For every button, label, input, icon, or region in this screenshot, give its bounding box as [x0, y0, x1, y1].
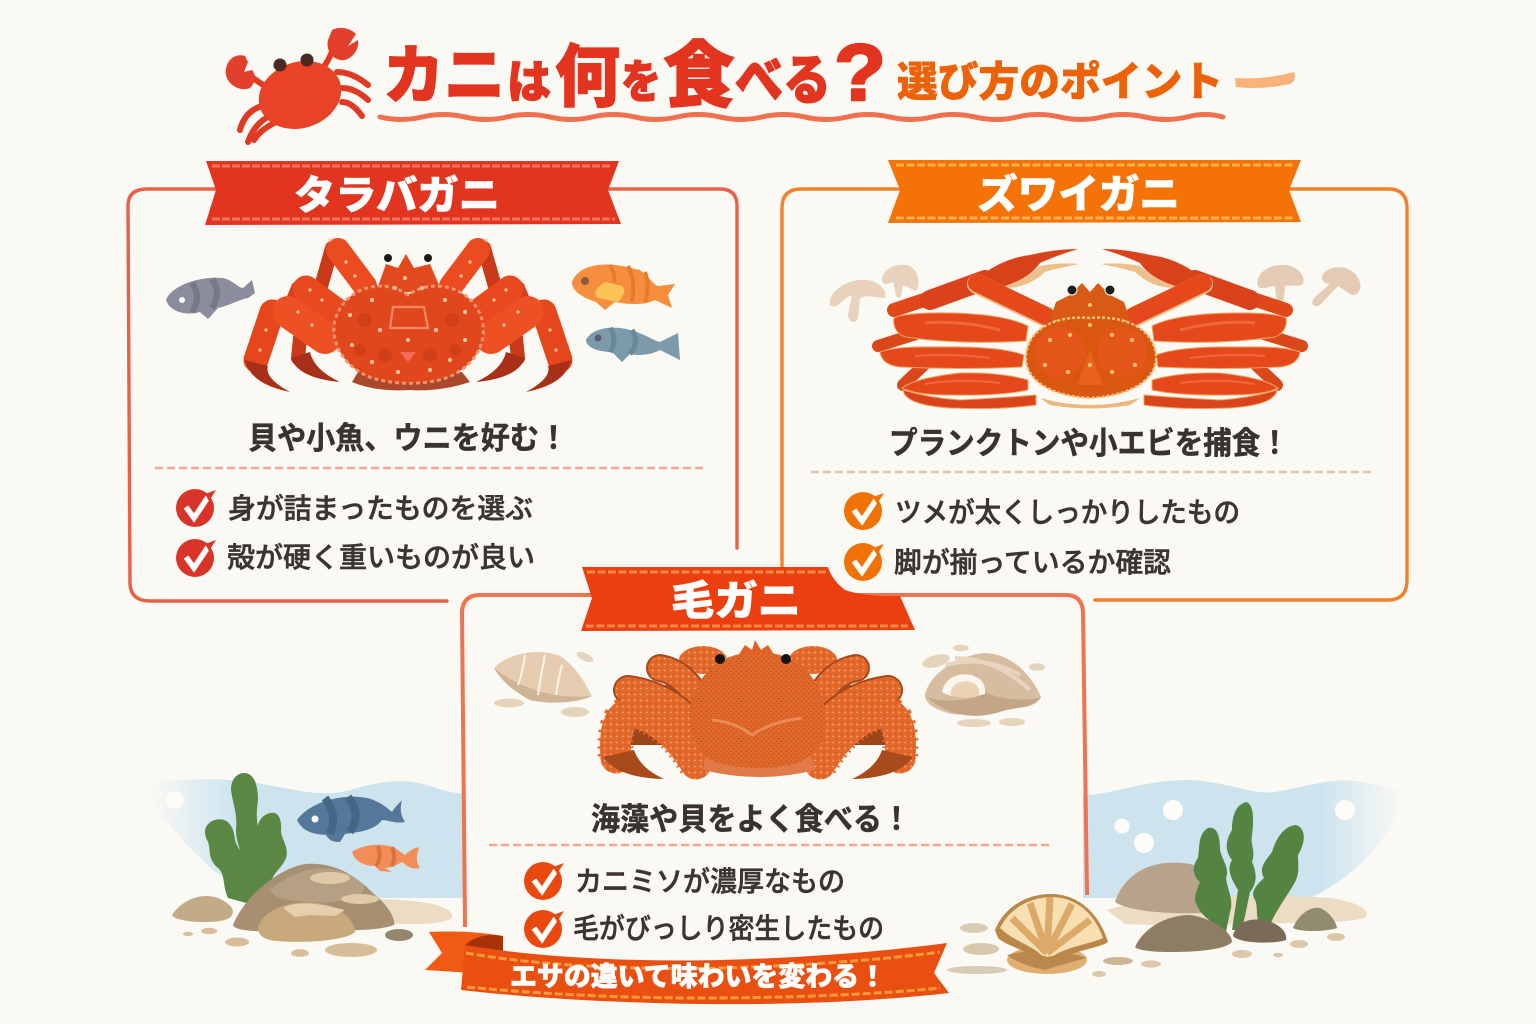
heading: タラバガニ: 貝や小魚、ウニを好む！ — [248, 421, 568, 456]
orange fish — [352, 845, 420, 872]
bubble left — [166, 791, 184, 809]
banner: タラバガニ: タラバガニ — [294, 174, 500, 218]
checklist item 1 — [176, 489, 533, 527]
title: を — [621, 56, 661, 108]
checklist item 2: 殻が硬く重いものが良い — [227, 542, 535, 573]
banner: 毛ガニ — [581, 567, 915, 631]
panel content: ズワイガニ — [811, 249, 1375, 581]
ribbon callout: エサの違いて味わいを変わる！ — [510, 962, 886, 992]
checklist item 2: 脚が揃っているか確認 — [894, 547, 1171, 578]
banner: ズワイガニ: ズワイガニ — [977, 172, 1180, 217]
ribbon callout — [425, 932, 949, 1004]
checklist item 1 — [524, 862, 845, 900]
icon: clam right — [921, 645, 1045, 727]
crab: タラバガニ — [245, 238, 571, 392]
rock back right — [1115, 863, 1212, 913]
water: left — [150, 779, 470, 898]
icon: mushrooms left — [830, 265, 918, 322]
wavy underline — [380, 114, 1223, 120]
checklist item 1: 身が詰まったものを選ぶ — [228, 493, 533, 524]
banner: 毛ガニ: 毛ガニ — [671, 578, 801, 624]
heading: ズワイガニ: プランクトンや小エビを捕食！ — [889, 426, 1289, 461]
icon: mushrooms right — [1257, 265, 1360, 306]
panel content: 毛ガニ — [489, 640, 1052, 948]
title row — [226, 28, 1295, 142]
title — [383, 28, 886, 117]
checklist item 1: カニミソが濃厚なもの — [575, 866, 845, 897]
title: 何 — [555, 40, 620, 116]
scallop shell — [995, 894, 1108, 974]
sand left — [375, 899, 452, 924]
checklist item 1: ツメが太くしっかりしたもの — [895, 497, 1240, 528]
title: カニ — [383, 40, 505, 112]
crab: ズワイガニ — [878, 249, 1302, 409]
rock large — [233, 864, 394, 931]
seaweed left — [205, 773, 287, 904]
panel: タラバガニ frame — [128, 189, 737, 601]
panel content: タラバガニ — [155, 238, 705, 577]
seaweed right — [1194, 802, 1304, 932]
title: は — [507, 56, 551, 108]
title: べる — [735, 51, 831, 111]
icon: orange fish — [572, 265, 675, 310]
water: right — [1080, 780, 1405, 898]
icon: grey fish — [166, 278, 255, 319]
banner: ズワイガニ — [888, 160, 1301, 223]
checklist item 2 — [176, 539, 535, 577]
icon: crab — [226, 28, 368, 142]
title: 食 — [663, 37, 735, 117]
panel: 毛ガニ frame — [462, 595, 1087, 927]
checklist item 2 — [844, 543, 1171, 581]
panel: ズワイガニ frame — [782, 189, 1407, 600]
rock front — [258, 902, 355, 942]
rock green grey — [1293, 908, 1337, 931]
heading: 毛ガニ: 海藻や貝をよく食べる！ — [591, 802, 911, 837]
banner: タラバガニ — [205, 161, 621, 225]
scene: right seabed — [947, 800, 1367, 977]
scene: left seabed — [166, 773, 452, 957]
checklist item 2: 毛がびっしり密生したもの — [573, 913, 884, 944]
pebbles right — [947, 923, 1345, 977]
pebbles left — [183, 928, 413, 957]
rock small left — [172, 896, 233, 922]
title: ? — [834, 28, 886, 117]
panel: 毛ガニ background — [463, 595, 1083, 1024]
icon: clam left — [494, 650, 595, 717]
bubbles right — [1114, 800, 1355, 853]
blue fish — [297, 797, 405, 842]
sand right — [1107, 896, 1367, 925]
checklist item 1 — [844, 492, 1240, 530]
subtitle: 選び方のポイント — [897, 59, 1223, 105]
dash accent — [1235, 72, 1295, 88]
rock dark right — [1233, 920, 1286, 943]
checklist item 2 — [524, 910, 884, 948]
icon: blue fish — [586, 328, 680, 362]
crab: 毛ガニ — [603, 640, 913, 779]
rock front right — [1135, 915, 1232, 952]
